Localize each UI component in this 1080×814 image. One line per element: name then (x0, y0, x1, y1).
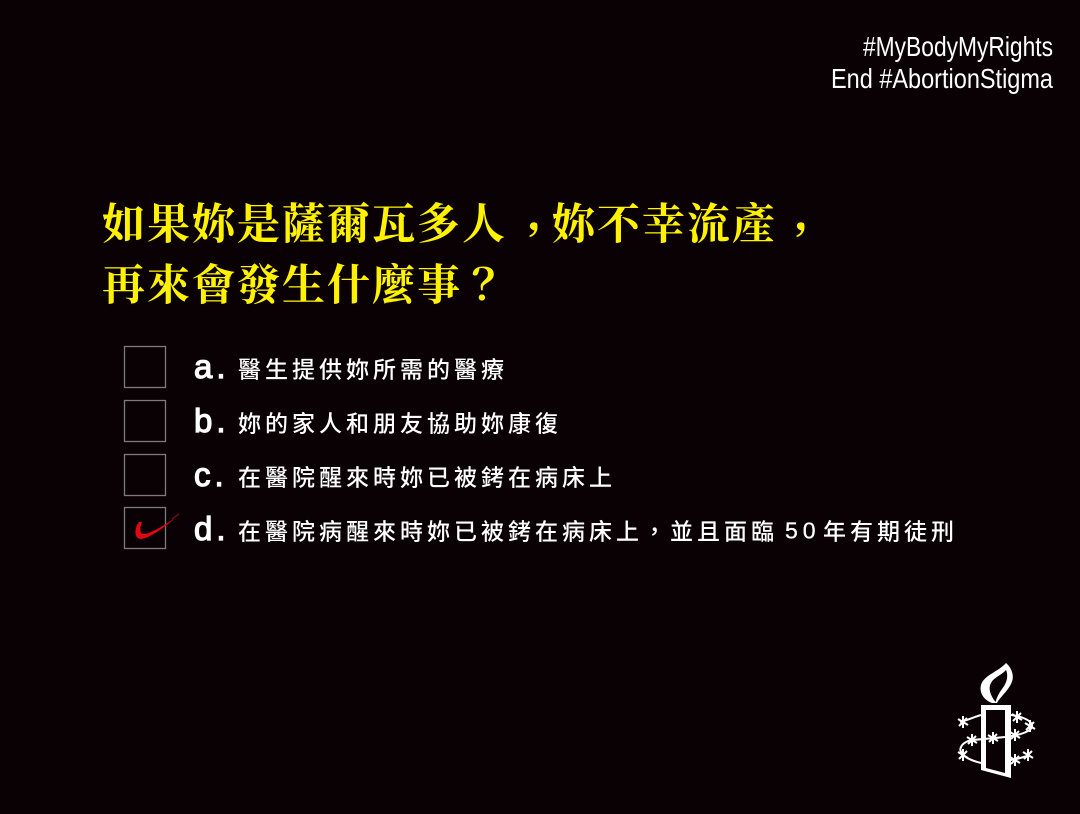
option b: b. (194, 402, 230, 439)
option c: 在醫院醒來時妳已被銬在病床上 (238, 458, 616, 492)
option c (124, 454, 616, 496)
option a: a. (194, 348, 230, 385)
icon: Amnesty candle logo (958, 663, 1035, 778)
option d: 在醫院病醒來時妳已被銬在病床上，並且面臨 (238, 512, 778, 546)
title: 妳不幸流產 (552, 191, 777, 252)
candle flame (981, 663, 1013, 703)
option d: 年有期徒刑 (823, 512, 958, 546)
option d: d. (194, 510, 230, 547)
title: 如果妳是薩爾瓦多人 (102, 191, 507, 252)
candle body (981, 705, 1011, 778)
title: 再來會發生什麼事？ (102, 252, 507, 313)
option a: 醫生提供妳所需的醫療 (238, 350, 508, 384)
title: ， (779, 199, 824, 260)
option b: 妳的家人和朋友協助妳康復 (238, 404, 562, 438)
hashtags (831, 31, 1053, 94)
title: ， (512, 199, 557, 260)
title (102, 191, 824, 313)
icon: red check mark (135, 514, 179, 539)
barbed wire (960, 715, 1032, 763)
wire barbs (958, 711, 1035, 766)
option b (124, 400, 562, 442)
option d (124, 508, 958, 548)
option d: 50 (785, 518, 821, 544)
option c: c. (194, 456, 228, 493)
option a (124, 346, 508, 388)
